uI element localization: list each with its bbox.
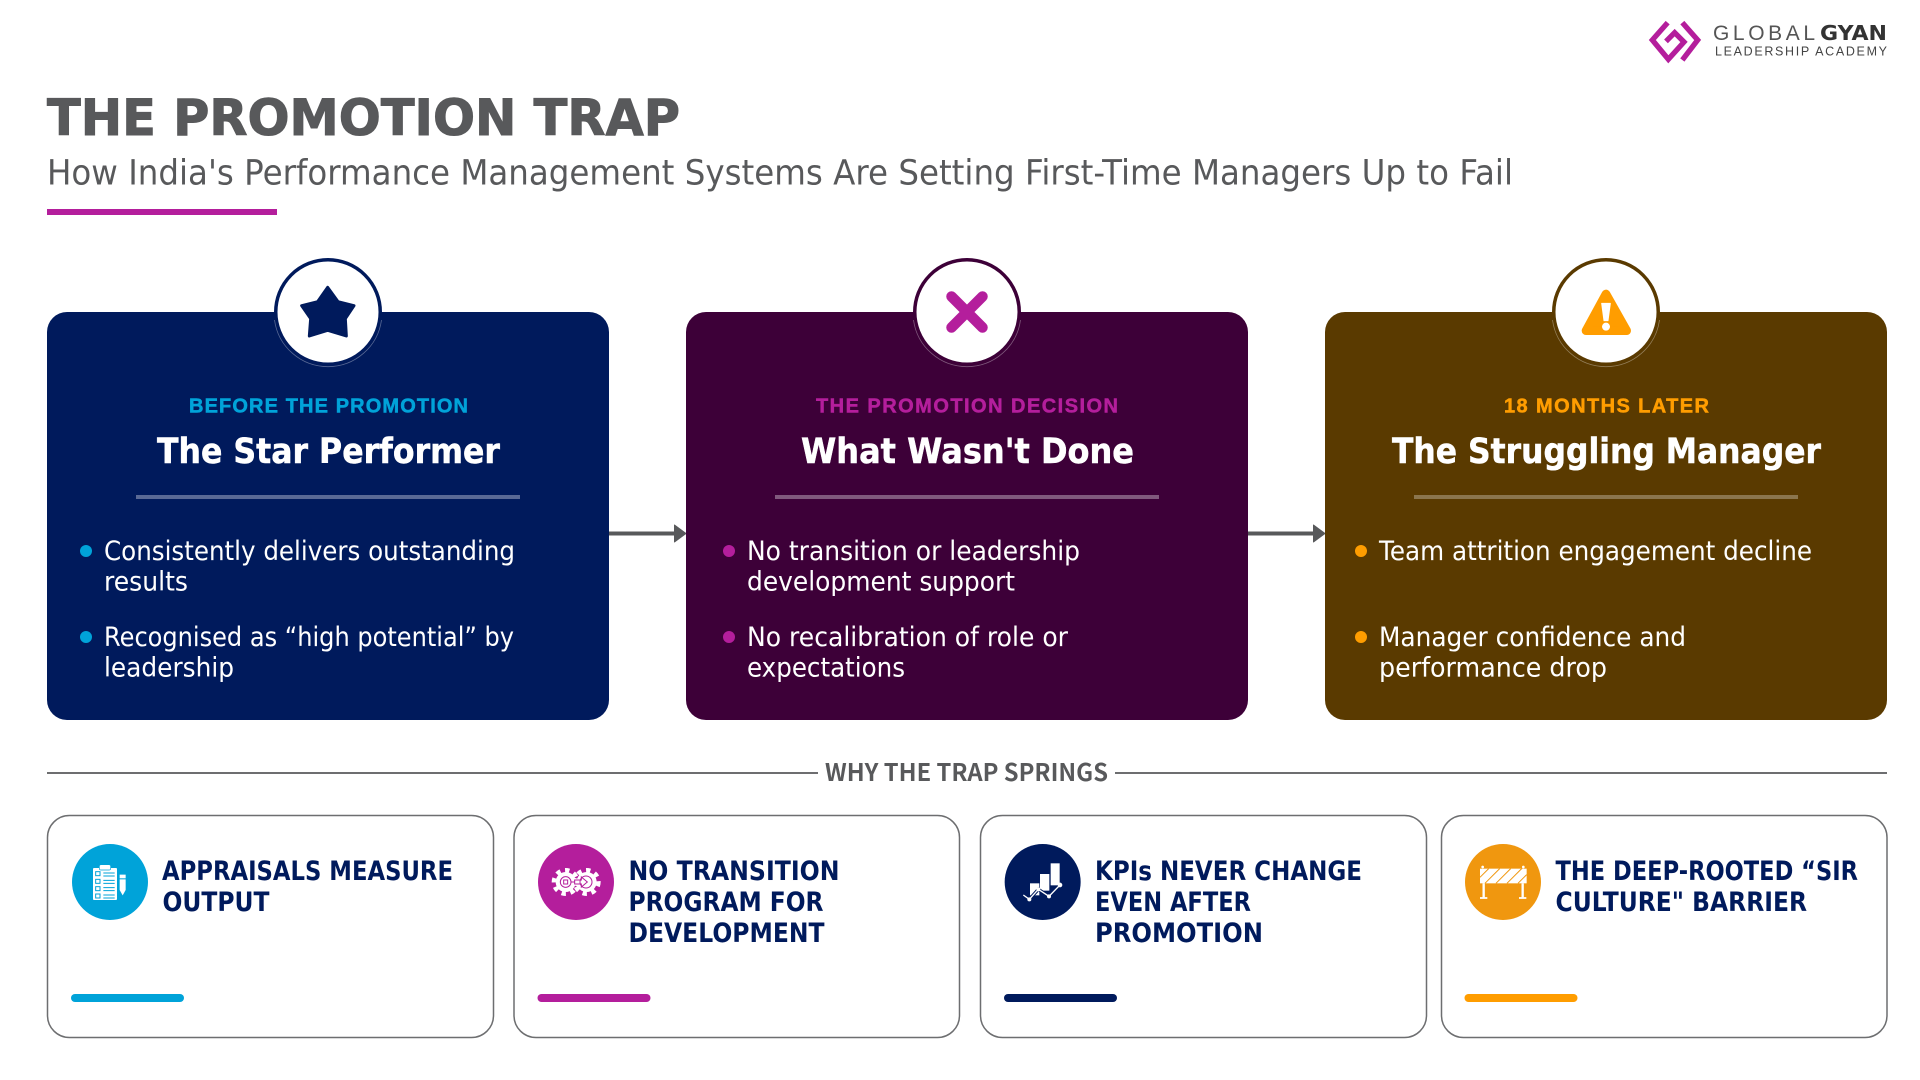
heading: THE DEEP-ROOTED “SIR — [1556, 856, 1858, 887]
heading — [1095, 856, 1362, 949]
bullet list — [1355, 536, 1812, 684]
heading: EVEN AFTER — [1095, 887, 1251, 918]
bullet list: results — [104, 566, 188, 598]
kicker: THE PROMOTION DECISION — [816, 396, 1118, 418]
bullet list: expectations — [747, 652, 905, 684]
card: sir culture barrier — [1442, 816, 1887, 1038]
accent bar — [1004, 994, 1117, 1002]
heading: KPIs NEVER CHANGE — [1095, 856, 1362, 887]
panel: before the promotion — [47, 260, 609, 720]
panel: 18 months later — [1325, 260, 1887, 720]
bullet list: Recognised as “high potential” by — [104, 622, 514, 653]
kicker: BEFORE THE PROMOTION — [189, 396, 468, 418]
bullet list — [80, 536, 515, 684]
icon: cross badge — [914, 260, 1020, 367]
bullet list: Manager confidence and — [1379, 622, 1686, 653]
subtitle: How India's Performance Management Systems Are Setting First-Time Managers Up to Fail — [47, 154, 1513, 194]
bullet list: Team attrition engagement decline — [1378, 536, 1812, 567]
icon: clipboard and pen — [72, 844, 148, 920]
heading: What Wasn't Done — [801, 432, 1134, 472]
heading — [628, 856, 840, 949]
bullet list: Consistently delivers outstanding — [104, 536, 515, 567]
title underline — [47, 209, 277, 215]
arrow: decision to later — [1248, 525, 1325, 542]
icon: warning badge — [1552, 260, 1660, 367]
section heading: why the trap springs: WHY THE TRAP SPRINGS — [825, 753, 1108, 788]
bullet list: No transition or leadership — [747, 536, 1080, 567]
logo: Global Gyan Leadership Academy: LEADERSHIP ACADEMY — [1715, 45, 1888, 59]
accent bar — [538, 994, 650, 1002]
logo: Global Gyan Leadership Academy: GYAN — [1820, 21, 1887, 45]
card: KPIs never change — [980, 816, 1426, 1038]
bullet list: leadership — [104, 652, 234, 684]
icon: gears with arrow — [538, 844, 614, 920]
card: no transition program — [514, 816, 960, 1038]
title: THE PROMOTION TRAP — [47, 89, 680, 147]
logo: Global Gyan Leadership Academy — [1652, 21, 1888, 60]
icon: bar and line chart — [1005, 844, 1081, 920]
heading: DEVELOPMENT — [628, 918, 825, 949]
heading — [1556, 856, 1858, 918]
heading: NO TRANSITION — [628, 856, 840, 887]
heading: APPRAISALS MEASURE — [162, 856, 453, 887]
logo: Global Gyan Leadership Academy: GLOBAL — [1713, 22, 1815, 45]
bullet list — [723, 536, 1080, 684]
heading — [162, 856, 453, 918]
card: appraisals measure output — [48, 816, 494, 1038]
heading: The Struggling Manager — [1392, 432, 1822, 472]
panel: promotion decision — [686, 260, 1248, 720]
heading: PROMOTION — [1095, 918, 1263, 949]
accent bar — [1464, 994, 1578, 1002]
icon: star badge — [274, 260, 382, 367]
arrow: before to decision — [609, 525, 686, 542]
bullet list: development support — [747, 566, 1015, 598]
bullet list: No recalibration of role or — [747, 622, 1068, 653]
heading: The Star Performer — [157, 432, 501, 472]
accent bar — [71, 994, 184, 1002]
heading: CULTURE" BARRIER — [1556, 887, 1807, 918]
heading: OUTPUT — [162, 887, 270, 918]
icon: road barrier — [1465, 844, 1541, 920]
heading: PROGRAM FOR — [628, 887, 824, 918]
kicker: 18 MONTHS LATER — [1504, 396, 1710, 418]
bullet list: performance drop — [1379, 652, 1607, 684]
